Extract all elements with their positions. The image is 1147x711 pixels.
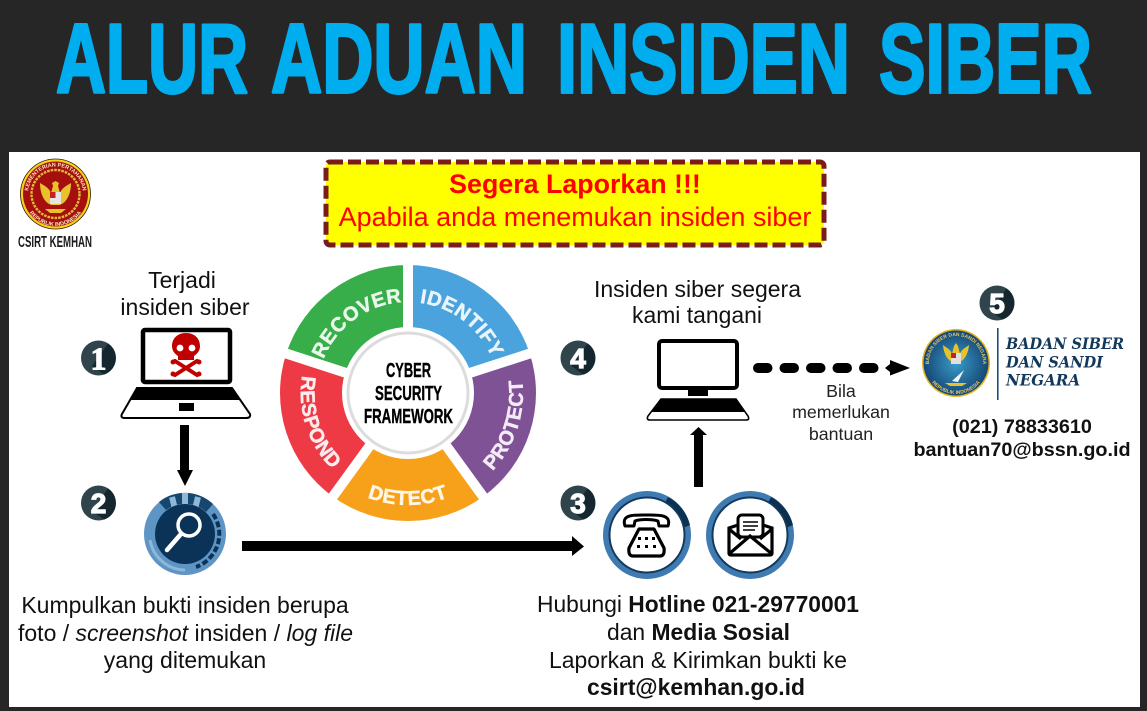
label: respond: RESPOND — [300, 376, 340, 466]
wheel centre text — [364, 360, 453, 428]
logo: BSSN: BADAN SIBER DAN SANDI NEGARA — [926, 332, 986, 364]
step 4 text: Insiden siber segera — [594, 276, 801, 302]
title: ADUAN — [271, 4, 527, 114]
note: when help is needed: memerlukan — [792, 402, 890, 422]
wheel centre text: FRAMEWORK — [364, 406, 453, 428]
badge 3 — [560, 486, 596, 520]
segment: identify — [408, 265, 530, 393]
badge 4 — [560, 340, 596, 376]
label: identify: IDENTIFY — [420, 289, 504, 354]
icon: envelope — [706, 491, 794, 579]
wheel centre text: CYBER — [386, 360, 431, 382]
badge 5 — [980, 286, 1014, 320]
BSSN name: BADAN SIBER — [1005, 334, 1124, 353]
step 5 contact: (021) 78833610 — [952, 416, 1092, 438]
logo: CSIRT Kemhan — [20, 158, 91, 230]
callout: report now: Segera Laporkan !!! — [449, 169, 701, 199]
badge 2 — [81, 486, 116, 520]
logo: BSSN: REPUBLIK INDONESIA — [932, 380, 980, 394]
badge 1: 1 — [90, 340, 106, 376]
step 2 text: foto / screenshot insiden / log file — [18, 620, 353, 646]
segment: protect — [408, 353, 536, 497]
logo: CSIRT Kemhan: KEMENTERIAN PERTAHANAN — [24, 162, 86, 191]
step 3 text: Laporkan & Kirimkan bukti ke — [549, 647, 847, 673]
title: ALUR — [56, 4, 248, 114]
step 1 text: Terjadi — [148, 267, 216, 293]
BSSN name: NEGARA — [1005, 370, 1080, 390]
icon: magnifier — [144, 493, 226, 575]
icon: laptop with skull — [121, 330, 250, 418]
step 4 text: kami tangani — [632, 302, 762, 328]
title — [56, 4, 1092, 114]
label: protect: PROTECT — [482, 380, 524, 470]
step 3 text: csirt@kemhan.go.id — [587, 674, 805, 700]
icon: red skull and crossbones — [170, 333, 202, 376]
arrow: step 2 to step 3 — [242, 536, 584, 556]
callout: report now: Apabila anda menemukan insiden siber — [339, 202, 811, 232]
label: detect: DETECT — [368, 484, 445, 506]
segment: recover — [286, 265, 408, 393]
badge 3: 3 — [570, 488, 586, 519]
segment: respond — [280, 353, 408, 497]
logo caption: CSIRT KEMHAN — [18, 234, 92, 251]
step 2 text — [18, 592, 353, 673]
step 3 text — [537, 591, 859, 700]
step 3 text: dan Media Sosial — [607, 619, 790, 645]
step 2 text: yang ditemukan — [104, 647, 266, 673]
arrow: step 1 to step 2 — [177, 425, 193, 486]
note: when help is needed — [792, 381, 890, 444]
icon: telephone — [603, 491, 691, 579]
arrow: step 3 to step 4 — [690, 427, 707, 487]
logo: BSSN — [922, 329, 990, 397]
step 5 contact — [913, 416, 1131, 461]
step 3 text: Hubungi Hotline 021-29770001 — [537, 591, 859, 617]
BSSN name — [1005, 334, 1124, 390]
step 1 text: insiden siber — [120, 294, 250, 320]
segment: detect — [333, 393, 483, 521]
wheel centre text: SECURITY — [375, 383, 442, 405]
divider — [997, 328, 999, 400]
step 2 text: Kumpulkan bukti insiden berupa — [21, 592, 349, 618]
icon: computer — [647, 341, 749, 420]
step 1 text — [120, 267, 250, 320]
label: recover: RECOVER — [311, 289, 402, 358]
badge 1 — [81, 340, 116, 376]
title: INSIDEN — [557, 4, 850, 114]
callout: report now — [326, 162, 824, 245]
note: when help is needed: bantuan — [809, 424, 873, 444]
note: when help is needed: Bila — [826, 381, 856, 401]
badge 2: 2 — [91, 488, 106, 519]
badge 4: 4 — [570, 343, 586, 374]
panel: white content area — [9, 152, 1140, 707]
badge 5: 5 — [989, 288, 1005, 319]
logo: CSIRT Kemhan: REPUBLIK INDONESIA — [30, 210, 82, 226]
framework wheel — [280, 265, 536, 521]
BSSN name: DAN SANDI — [1005, 352, 1103, 372]
arrow: dashed to BSSN — [753, 360, 910, 376]
step 4 text — [594, 276, 801, 328]
step 5 contact: bantuan70@bssn.go.id — [913, 439, 1131, 461]
